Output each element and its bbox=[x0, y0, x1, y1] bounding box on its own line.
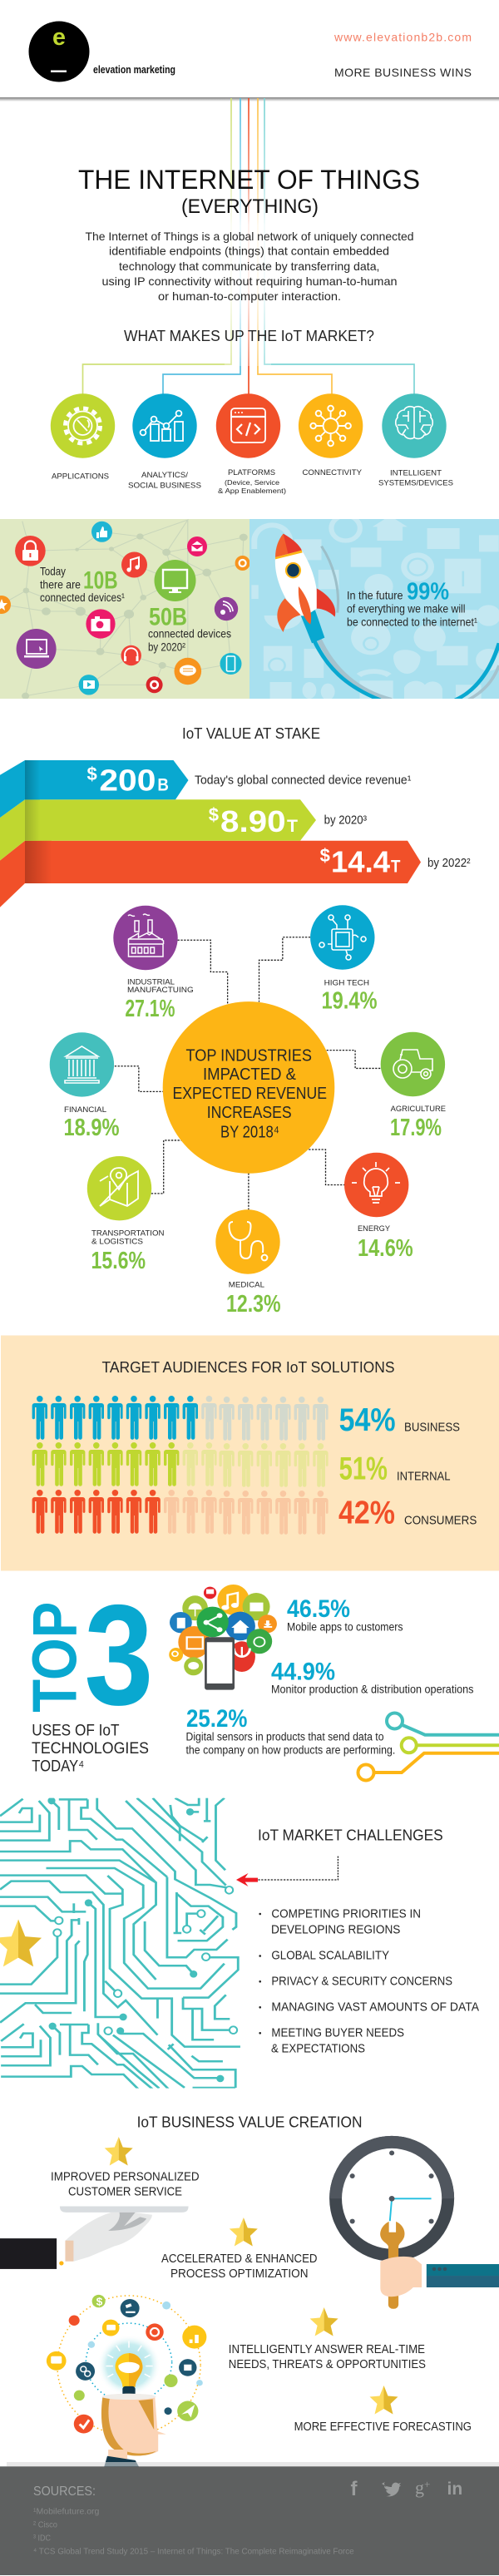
stat: monitor production: Monitor production & distribution operations bbox=[271, 1684, 474, 1696]
stat: 51 percent internal: INTERNAL bbox=[397, 1470, 451, 1483]
icon: laptop bbox=[17, 629, 57, 669]
center circle: top industries bbox=[163, 1001, 334, 1174]
industry: agriculture bbox=[381, 1032, 446, 1141]
intro text: technology that communicate by transferring data, bbox=[119, 260, 379, 273]
icon: facebook: f bbox=[351, 2478, 358, 2500]
title: (EVERYTHING) bbox=[181, 195, 319, 218]
circuit traces top right bbox=[358, 1713, 499, 1780]
market category: connectivity: CONNECTIVITY bbox=[303, 468, 363, 477]
heading: sources: SOURCES: bbox=[33, 2485, 96, 2499]
text: 10B connected devices today: connected devices¹ bbox=[40, 591, 125, 604]
icon: wifi bbox=[215, 597, 238, 621]
connector lines to market circles bbox=[83, 98, 414, 394]
icon: rocket bbox=[275, 534, 335, 643]
value item: customer service bbox=[51, 2137, 200, 2199]
value: 200B bbox=[86, 764, 169, 798]
heading: top 3 uses bbox=[20, 1575, 153, 1775]
industry: agriculture: 17.9% bbox=[390, 1115, 442, 1141]
icon: camera bbox=[86, 609, 116, 639]
icon: mail bbox=[187, 536, 207, 556]
intro text: using IP connectivity without requiring human-to-human bbox=[101, 274, 398, 288]
list: market challenges bbox=[259, 1908, 479, 2056]
icon: headphones bbox=[121, 645, 141, 665]
website url: www.elevationb2b.com bbox=[333, 30, 472, 43]
list: market challenges: GLOBAL SCALABILITY bbox=[271, 1950, 389, 1963]
industry: industrial manufacturing bbox=[113, 906, 194, 1022]
list: market challenges: DEVELOPING REGIONS bbox=[271, 1924, 400, 1937]
heading: top 3 uses: TECHNOLOGIES bbox=[32, 1739, 149, 1758]
market category: platforms: & App Enablement) bbox=[218, 487, 286, 495]
heading: business value creation: IoT BUSINESS VALUE CREATION bbox=[137, 2113, 363, 2131]
icon: linkedin: in bbox=[447, 2480, 462, 2499]
panel: footer sources bbox=[0, 2462, 499, 2575]
heading: top 3 uses: TOP bbox=[20, 1602, 90, 1713]
value item: forecasting bbox=[294, 2386, 472, 2434]
illustration: clock and wrench bbox=[329, 2136, 499, 2309]
list: market challenges: & EXPECTATIONS bbox=[271, 2043, 365, 2056]
stat: 42 percent consumers: 42% bbox=[338, 1496, 395, 1531]
illustration: head with lightbulb and orbiting icons: $ bbox=[96, 2296, 103, 2308]
stat: monitor production bbox=[271, 1658, 474, 1696]
intro text: or human-to-computer interaction. bbox=[158, 289, 341, 303]
value: 8.90T bbox=[209, 804, 298, 838]
text: 10B connected devices today bbox=[40, 566, 125, 604]
heading: IoT value at stake: IoT VALUE AT STAKE bbox=[182, 724, 320, 742]
text: 99 percent connected in future: be connected to the internet¹ bbox=[347, 616, 477, 629]
industry: industrial manufacturing: MANUFACTUING bbox=[127, 986, 194, 995]
panel: target audiences bbox=[1, 1336, 499, 1570]
intro text: The Internet of Things is a global network of uniquely connected bbox=[85, 230, 414, 243]
icon: cable bbox=[314, 546, 499, 700]
value: 14.4T: $ bbox=[320, 845, 330, 866]
text: 99 percent connected in future: 99% bbox=[407, 579, 449, 606]
industry: agriculture: AGRICULTURE bbox=[391, 1105, 446, 1114]
value item: customer service: IMPROVED PERSONALIZED bbox=[51, 2170, 200, 2184]
market category: analytics: ANALYTICS/ bbox=[141, 471, 188, 480]
industry: transportation bbox=[87, 1156, 165, 1274]
value item: real-time needs bbox=[229, 2307, 426, 2371]
stat: 51 percent internal bbox=[339, 1451, 451, 1487]
market category: analytics: SOCIAL BUSINESS bbox=[128, 482, 201, 491]
market category: applications: APPLICATIONS bbox=[52, 472, 109, 481]
list: sources: ² Cisco bbox=[33, 2521, 57, 2530]
value item: process optimization: PROCESS OPTIMIZATION bbox=[170, 2267, 308, 2281]
center circle: top industries: EXPECTED REVENUE bbox=[173, 1084, 327, 1103]
stat: monitor production: 44.9% bbox=[271, 1658, 335, 1685]
industry: financial bbox=[50, 1032, 120, 1141]
industry: transportation: & LOGISTICS bbox=[91, 1237, 143, 1246]
circuit board graphic bbox=[0, 1797, 240, 2155]
value item: process optimization bbox=[161, 2218, 318, 2281]
industry: transportation: 15.6% bbox=[91, 1248, 146, 1274]
text: 50B connected devices by 2020: 50B bbox=[149, 604, 187, 631]
text: 99 percent connected in future: In the future bbox=[347, 590, 403, 602]
industry connector dotted lines bbox=[115, 937, 381, 1209]
stat: digital sensors bbox=[186, 1705, 395, 1757]
text: 50B connected devices by 2020: by 2020² bbox=[148, 641, 185, 654]
industry: medical bbox=[215, 1209, 281, 1318]
icon: twitter bbox=[382, 2482, 401, 2496]
title bbox=[78, 165, 420, 218]
list: market challenges: MEETING BUYER NEEDS bbox=[271, 2027, 404, 2040]
stat: 54 percent business: 54% bbox=[339, 1402, 396, 1438]
industry: industrial manufacturing: INDUSTRIAL bbox=[127, 977, 175, 986]
icon: video bbox=[79, 675, 99, 695]
center circle: top industries: BY 2018⁴ bbox=[220, 1123, 279, 1141]
background icons bbox=[251, 516, 499, 700]
value: 8.90T: T bbox=[287, 817, 298, 836]
value item: real-time needs: NEEDS, THREATS & OPPORTUNITIES bbox=[229, 2357, 426, 2371]
stat: mobile apps: 46.5% bbox=[287, 1595, 350, 1623]
stat: mobile apps bbox=[287, 1595, 403, 1634]
list: market challenges: PRIVACY & SECURITY CONCERNS bbox=[271, 1975, 452, 1989]
text: 50B connected devices by 2020 bbox=[148, 604, 231, 654]
value item: process optimization: ACCELERATED & ENHANCED bbox=[161, 2252, 318, 2266]
header bbox=[0, 22, 499, 101]
icon: monitor bbox=[155, 560, 196, 601]
text: 99 percent connected in future bbox=[347, 579, 477, 629]
list: sources: ¹Mobilefuture.org bbox=[33, 2507, 99, 2516]
industry: energy: ENERGY bbox=[358, 1224, 391, 1234]
icon: lock bbox=[15, 536, 46, 566]
ribbon captions: Today's global connected device revenue¹ bbox=[195, 774, 412, 788]
stat: 51 percent internal: 51% bbox=[339, 1451, 388, 1487]
icon: google plus: + bbox=[424, 2478, 430, 2490]
market category: analytics bbox=[128, 393, 201, 491]
icon: google plus: g bbox=[415, 2477, 424, 2498]
ribbon captions: by 2020³ bbox=[324, 814, 367, 828]
icon: music bbox=[121, 552, 147, 577]
market category: intelligent systems: SYSTEMS/DEVICES bbox=[378, 478, 453, 487]
icon: gear red bbox=[146, 676, 163, 693]
value item: forecasting: MORE EFFECTIVE FORECASTING bbox=[294, 2420, 472, 2434]
value: 200B: $ bbox=[86, 764, 97, 784]
pictogram row: consumers bbox=[32, 1490, 329, 1535]
list: sources: ⁴ TCS Global Trend Study 2015 – Internet of Things: The Complete Reimaginative Force bbox=[33, 2548, 354, 2557]
industry: high tech: HIGH TECH bbox=[324, 979, 369, 988]
industry: medical: 12.3% bbox=[226, 1291, 281, 1318]
industry: financial: FINANCIAL bbox=[64, 1105, 106, 1115]
industry: medical: MEDICAL bbox=[229, 1280, 264, 1289]
logo: elevation marketing: e bbox=[52, 24, 66, 51]
value: 8.90T: 8.90 bbox=[220, 804, 286, 838]
pictogram row: business bbox=[32, 1396, 329, 1441]
market category: platforms: PLATFORMS bbox=[228, 468, 275, 477]
list: sources: ³ IDC bbox=[33, 2534, 51, 2543]
text: 50B connected devices by 2020: connected devices bbox=[148, 628, 231, 640]
market category: intelligent systems bbox=[378, 393, 453, 487]
value: 200B: B bbox=[157, 776, 169, 795]
icon: gear bbox=[235, 556, 250, 571]
value: 14.4T: 14.4 bbox=[331, 845, 390, 879]
heading: top 3 uses: TODAY⁴ bbox=[32, 1757, 84, 1775]
stat: digital sensors: the company on how products are performing. bbox=[186, 1744, 395, 1757]
panel: connected devices today bbox=[0, 519, 250, 700]
market category: intelligent systems: INTELLIGENT bbox=[390, 469, 442, 477]
industry: energy: 14.6% bbox=[358, 1235, 413, 1262]
value: 14.4T: T bbox=[391, 858, 401, 877]
text: 10B connected devices today: there are bbox=[40, 579, 81, 591]
arrow: challenges pointer bbox=[236, 1857, 338, 1886]
ribbon captions: by 2022² bbox=[427, 857, 471, 870]
value: 8.90T: $ bbox=[209, 804, 219, 825]
title: THE INTERNET OF THINGS bbox=[78, 165, 420, 195]
industry: high tech: 19.4% bbox=[321, 988, 378, 1015]
text: 10B connected devices today: Today bbox=[40, 566, 66, 578]
stat: 42 percent consumers: CONSUMERS bbox=[404, 1515, 477, 1528]
stat: mobile apps: Mobile apps to customers bbox=[287, 1621, 403, 1634]
panel: future rocket bbox=[250, 516, 499, 700]
stat: 54 percent business: BUSINESS bbox=[404, 1421, 460, 1435]
industry: transportation: TRANSPORTATION bbox=[91, 1229, 165, 1238]
illustration: head with lightbulb and orbiting icons bbox=[47, 2295, 206, 2467]
market category: platforms: (Device, Service bbox=[225, 478, 279, 487]
stat: digital sensors: Digital sensors in products that send data to bbox=[186, 1731, 384, 1743]
icon: phone bbox=[220, 653, 241, 675]
center circle: top industries: TOP INDUSTRIES bbox=[186, 1046, 312, 1065]
industry: financial: 18.9% bbox=[63, 1115, 120, 1141]
logo: elevation marketing bbox=[28, 22, 175, 82]
list: market challenges: MANAGING VAST AMOUNTS OF DATA bbox=[271, 2001, 479, 2015]
tagline: MORE BUSINESS WINS bbox=[334, 66, 472, 79]
industry: industrial manufacturing: 27.1% bbox=[125, 996, 175, 1022]
ribbon captions bbox=[195, 774, 471, 870]
heading: target audiences: TARGET AUDIENCES FOR IoT SOLUTIONS bbox=[101, 1358, 394, 1376]
heading: market challenges: IoT MARKET CHALLENGES bbox=[258, 1826, 443, 1843]
market category: applications bbox=[51, 393, 115, 481]
value: 200B: 200 bbox=[99, 764, 156, 798]
list: market challenges: COMPETING PRIORITIES IN bbox=[271, 1908, 421, 1921]
illustration: waiter hand with tray bbox=[0, 2206, 189, 2269]
intro text bbox=[85, 230, 414, 303]
pictogram row: internal bbox=[32, 1442, 329, 1487]
ribbon chart: value at stake bbox=[0, 760, 421, 907]
intro text: identifiable endpoints (things) that contain embedded bbox=[109, 245, 389, 258]
stat: digital sensors: 25.2% bbox=[186, 1705, 247, 1733]
industry: high tech bbox=[310, 905, 378, 1015]
industry: energy bbox=[344, 1153, 413, 1262]
market category: connectivity bbox=[299, 393, 363, 477]
heading: top 3 uses: USES OF IoT bbox=[32, 1722, 120, 1740]
center circle: top industries: INCREASES bbox=[207, 1103, 292, 1122]
icon: thumbs up bbox=[91, 522, 112, 542]
value item: real-time needs: INTELLIGENTLY ANSWER REAL-TIME bbox=[229, 2342, 425, 2356]
icon: circuit star bbox=[0, 1919, 42, 1966]
stat: 54 percent business bbox=[339, 1402, 460, 1438]
list: sources bbox=[33, 2507, 354, 2557]
value item: customer service: CUSTOMER SERVICE bbox=[68, 2185, 182, 2199]
heading: top 3 uses: 3 bbox=[84, 1575, 153, 1735]
logo: elevation marketing: elevation marketing bbox=[93, 63, 175, 76]
heading: what makes up the market: WHAT MAKES UP THE IoT MARKET? bbox=[124, 328, 374, 344]
text: 99 percent connected in future: of everything we make will bbox=[347, 603, 466, 616]
stat: 42 percent consumers bbox=[338, 1496, 477, 1531]
text: 10B connected devices today: 10B bbox=[83, 566, 118, 594]
icon: chat bbox=[175, 658, 201, 685]
center circle: top industries: IMPACTED & bbox=[203, 1065, 296, 1084]
market category: platforms bbox=[216, 393, 286, 495]
icon: star bbox=[0, 596, 11, 614]
icon cluster: mobile apps bbox=[169, 1585, 277, 1690]
